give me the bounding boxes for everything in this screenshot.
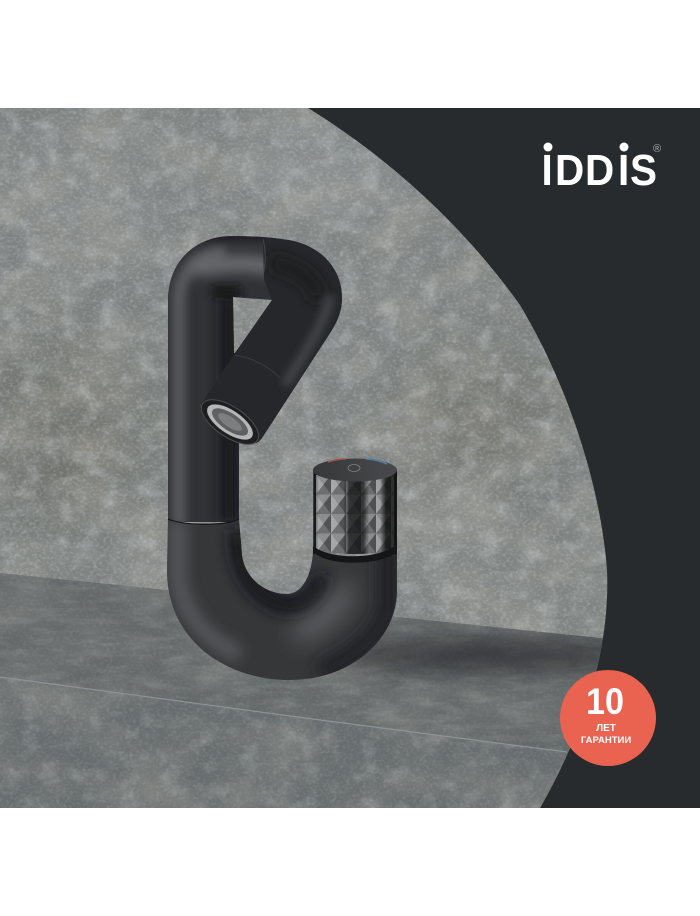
- logo: registered mark: ®: [653, 143, 661, 155]
- shelf top surface: [0, 573, 603, 800]
- background: dark panel: [0, 108, 700, 808]
- faucet: diamond-knurled handle: [313, 458, 397, 563]
- badge label: years: ЛЕТ: [596, 723, 616, 734]
- faucet: diagonal spout arm: [200, 239, 342, 444]
- shelf front face: [0, 679, 564, 808]
- shelf front edge highlight: [0, 677, 567, 752]
- infographic canvas: [0, 108, 700, 808]
- badge: 10 years warranty: [560, 670, 656, 766]
- badge number: 10: [586, 681, 624, 722]
- faucet: lower J-shaped body: [167, 520, 397, 680]
- photo: stone wall and shelf, arched crop: [0, 108, 640, 810]
- logo: dots over the letter i: [544, 142, 628, 152]
- badge label: warranty: ГАРАНТИИ: [581, 735, 631, 746]
- logo: IDDIS: IDDIS: [542, 145, 657, 194]
- cast shadow of faucet on shelf: [340, 637, 640, 673]
- stone wall: [0, 108, 620, 808]
- faucet: nozzle aerator face: [194, 391, 266, 453]
- faucet: upper column and top bend: [168, 236, 342, 522]
- faucet: body seam: [168, 519, 239, 524]
- faucet: [160, 230, 405, 685]
